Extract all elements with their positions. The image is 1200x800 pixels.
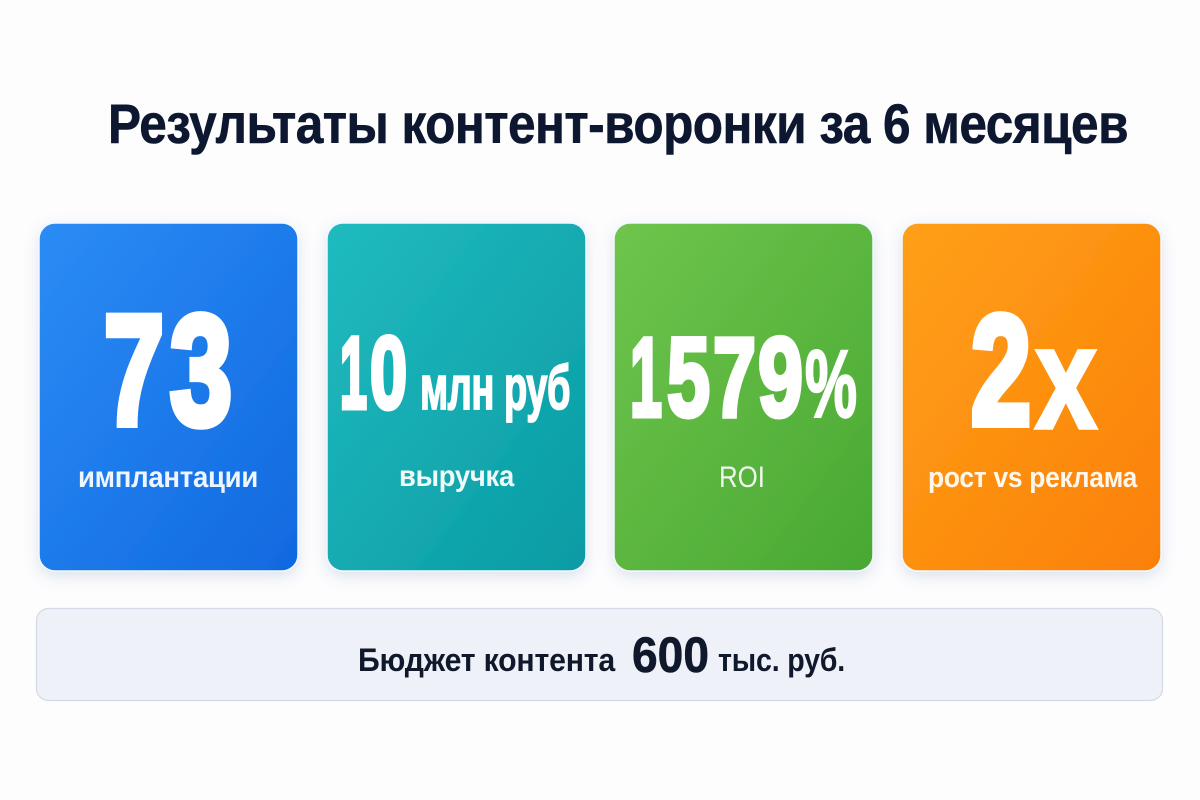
value: 2x: 2 — [971, 284, 1031, 458]
value: 1579%: 9 — [758, 315, 803, 440]
value: 1579%: 7 — [713, 315, 756, 440]
value: 73: 3 — [170, 284, 232, 458]
value: 2x: x — [1035, 296, 1097, 459]
value: 10 million rubles: 1 — [340, 316, 367, 430]
value: 2x — [971, 284, 1097, 459]
panel: content budget — [36, 608, 1162, 700]
label: growth vs ads: рост vs реклама — [928, 462, 1138, 494]
panel: ROI card — [614, 223, 873, 571]
budget value: 600 — [632, 627, 709, 683]
value: 1579%: 5 — [667, 315, 710, 440]
label: ROI: ROI — [719, 461, 765, 494]
value: 10 million rubles: 0 — [370, 316, 407, 430]
value: 1579%: 1 — [630, 315, 662, 440]
value: 10 million rubles: млн руб — [420, 354, 570, 423]
value: 10 million rubles — [340, 316, 570, 430]
budget unit: тыс. руб. — [718, 642, 845, 678]
budget label: Бюджет контента — [358, 642, 615, 678]
value: 73 — [104, 284, 232, 458]
label: revenue: выручка — [399, 460, 515, 493]
value: 1579% — [630, 315, 857, 440]
value: 1579%: % — [805, 331, 857, 438]
panel: implants card — [39, 223, 298, 571]
label: implants: имплантации — [78, 461, 258, 494]
value: 73: 7 — [104, 284, 164, 458]
panel: growth card — [902, 223, 1161, 571]
panel: revenue card — [327, 223, 586, 571]
